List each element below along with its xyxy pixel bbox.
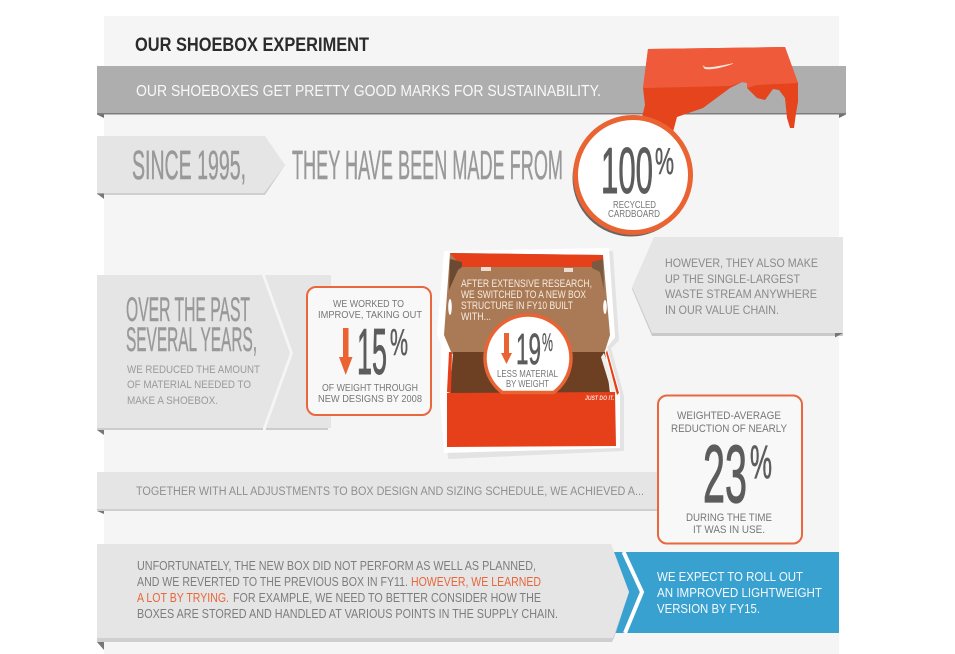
grey banner	[97, 66, 846, 118]
however text	[665, 256, 818, 317]
ribbon: together	[97, 472, 659, 514]
callout: 15 percent: NEW DESIGNS BY 2008	[318, 393, 422, 405]
open shoebox	[438, 249, 623, 458]
icon: swoosh	[703, 64, 733, 69]
icon: down arrow	[339, 328, 352, 375]
banner text: OUR SHOEBOXES GET PRETTY GOOD MARKS FOR SUSTAINABILITY.	[136, 83, 601, 100]
open shoebox: %	[542, 329, 553, 357]
cardboard label: CARDBOARD	[608, 208, 660, 220]
box text	[461, 278, 592, 323]
callout: 23 percent: WEIGHTED-AVERAGE	[677, 410, 781, 422]
however text: IN OUR VALUE CHAIN.	[665, 303, 779, 317]
over the past body: WE REDUCED THE AMOUNT	[127, 364, 260, 376]
callout: 15 percent: WE WORKED TO	[333, 298, 404, 310]
unfortunately text: FOR EXAMPLE, WE NEED TO BETTER CONSIDER HOW THE	[233, 591, 541, 605]
less material label: LESS MATERIAL	[497, 368, 558, 380]
ribbon: since 1995	[97, 136, 285, 199]
ribbon: over the past several years: OVER THE PAST	[126, 291, 250, 329]
circle: 100% recycled cardboard	[572, 118, 690, 236]
19 number: 19	[516, 325, 541, 374]
box text: WITH...	[461, 311, 491, 323]
unfortunately text: HOWEVER, WE LEARNED	[411, 575, 541, 589]
icon: down arrow	[501, 333, 512, 364]
blue panel text	[657, 569, 822, 616]
box text: WE SWITCHED TO A NEW BOX	[461, 289, 587, 301]
however text: UP THE SINGLE-LARGEST	[665, 272, 801, 286]
blue panel text: WE EXPECT TO ROLL OUT	[657, 569, 803, 584]
callout: 15 percent: IMPROVE, TAKING OUT	[318, 309, 423, 321]
callout: 23 percent: IT WAS IN USE.	[693, 524, 765, 536]
unfortunately text: BOXES ARE STORED AND HANDLED AT VARIOUS POINTS IN THE SUPPLY CHAIN.	[137, 607, 558, 621]
percent sign: %	[655, 141, 674, 182]
however text: WASTE STREAM ANYWHERE	[665, 287, 817, 301]
blue panel text: AN IMPROVED LIGHTWEIGHT	[657, 585, 822, 600]
just do it: JUST DO IT.	[585, 395, 614, 402]
text: THEY HAVE BEEN MADE FROM	[292, 142, 563, 188]
blue panel text: VERSION BY FY15.	[657, 601, 760, 616]
circle: 19 percent	[485, 315, 571, 392]
callout: 23 percent	[658, 396, 802, 544]
callout: 15 percent: OF WEIGHT THROUGH	[322, 382, 418, 394]
ribbon: unfortunately	[97, 544, 629, 650]
over the past body: MAKE A SHOEBOX.	[127, 395, 218, 407]
background panel	[104, 16, 839, 654]
callout: 15 percent	[307, 287, 431, 415]
percent sign: %	[750, 435, 772, 488]
percent sign: %	[390, 322, 408, 363]
box text: STRUCTURE IN FY10 BUILT	[461, 300, 573, 312]
over the past body	[127, 364, 260, 407]
over the past body: OF MATERIAL NEEDED TO	[127, 379, 251, 391]
box text: AFTER EXTENSIVE RESEARCH,	[461, 278, 592, 290]
ribbon: over the past several years	[97, 275, 331, 435]
unfortunately text: UNFORTUNATELY, THE NEW BOX DID NOT PERFORM AS WELL AS PLANNED,	[137, 559, 536, 573]
blue panel: expected rollout	[605, 552, 839, 633]
by weight label: BY WEIGHT	[506, 378, 549, 390]
ribbon: since 1995: SINCE 1995,	[132, 142, 246, 188]
closed orange shoebox	[640, 47, 798, 132]
ribbon: however	[632, 237, 843, 338]
circle: 100% recycled cardboard: 100	[601, 134, 653, 207]
unfortunately text	[137, 559, 558, 621]
title: OUR SHOEBOX EXPERIMENT	[135, 35, 369, 56]
ribbon: over the past several years: SEVERAL YEARS,	[126, 321, 257, 359]
recycled label: RECYCLED	[613, 199, 656, 211]
together text: TOGETHER WITH ALL ADJUSTMENTS TO BOX DESIGN AND SIZING SCHEDULE, WE ACHIEVED A...	[136, 486, 644, 498]
callout: 23 percent: REDUCTION OF NEARLY	[671, 423, 788, 435]
callout: 15 percent: 15	[357, 315, 387, 388]
callout: 23 percent: 23	[703, 429, 747, 520]
unfortunately text: A LOT BY TRYING.	[137, 591, 229, 605]
however text: HOWEVER, THEY ALSO MAKE	[665, 256, 818, 270]
unfortunately text: AND WE REVERTED TO THE PREVIOUS BOX IN FY11.	[137, 575, 408, 589]
callout: 23 percent: DURING THE TIME	[686, 512, 772, 524]
